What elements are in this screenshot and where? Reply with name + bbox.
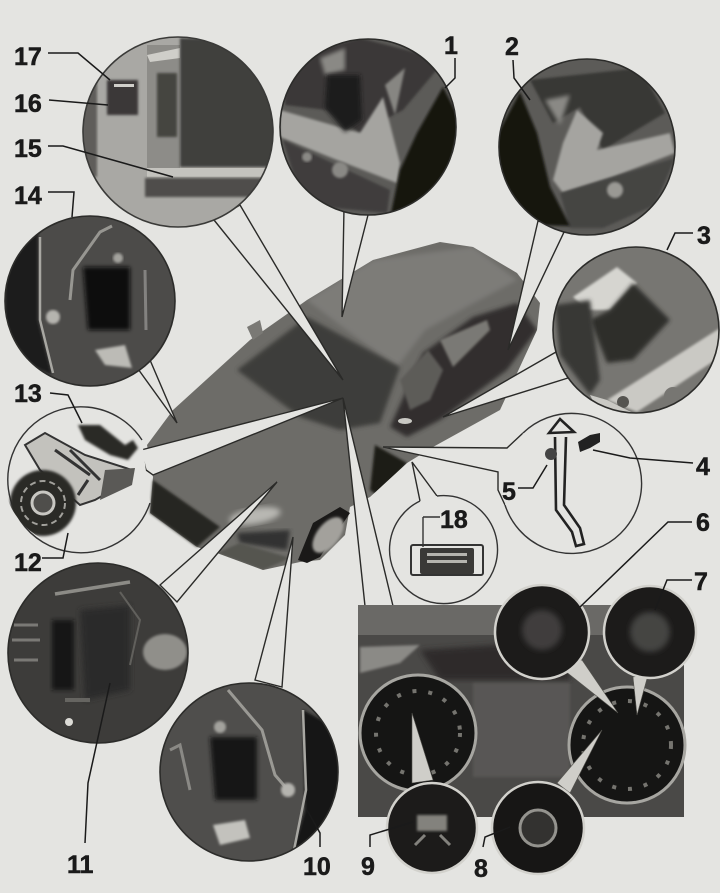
wedge to inset 1 xyxy=(342,208,368,317)
speedometer xyxy=(360,675,476,791)
label 1: 1 xyxy=(444,32,458,60)
front wheel xyxy=(298,507,350,563)
panel: circle inset 11 engine bay xyxy=(8,563,188,743)
panel: circle inset 4-5 brake pedal xyxy=(505,413,642,553)
label 16: 16 xyxy=(14,90,42,118)
panel: instrument cluster xyxy=(358,605,685,817)
wedge to inset 10 xyxy=(255,537,293,687)
label 11: 11 xyxy=(67,851,94,879)
panel: circle inset 3 fuse box xyxy=(553,247,720,415)
label 6: 6 xyxy=(696,509,710,537)
wedge to inset 3 xyxy=(443,352,568,417)
label 7: 7 xyxy=(694,568,708,596)
side windows area xyxy=(390,303,537,437)
circle inset 6 warning lamp xyxy=(495,585,589,679)
door mirror xyxy=(247,320,263,340)
label 9: 9 xyxy=(361,853,375,881)
tachometer xyxy=(569,687,685,803)
cluster callout wedges xyxy=(412,660,648,793)
label 4: 4 xyxy=(696,453,710,481)
label 13: 13 xyxy=(14,380,42,408)
grille xyxy=(150,480,220,547)
hood highlight xyxy=(228,504,282,528)
roof xyxy=(307,247,517,367)
label 5: 5 xyxy=(502,478,516,506)
panel: circle inset 18 connector xyxy=(390,496,498,604)
wedge to inset 4-5 xyxy=(383,433,560,505)
wedge to inset 11 xyxy=(160,482,277,602)
wedge to inset 12-13 xyxy=(141,398,343,475)
label 18: 18 xyxy=(440,506,468,534)
panel: circle inset 10 wheel arch xyxy=(160,683,340,862)
label 8: 8 xyxy=(474,855,488,883)
label 15: 15 xyxy=(14,135,42,163)
wedge to inset 2 xyxy=(508,221,565,350)
icon: pedal arm xyxy=(555,437,584,546)
leader wedges xyxy=(133,205,568,687)
circle inset 9 warning lamp xyxy=(387,783,477,873)
circle inset 8 warning lamp xyxy=(492,782,584,874)
windshield xyxy=(237,317,400,430)
label 2: 2 xyxy=(505,33,519,61)
circle inset 7 warning lamp xyxy=(604,586,696,678)
panel: circle inset 14 wheel arch xyxy=(5,216,175,386)
panel: circle inset 1 engine bay xyxy=(280,38,460,218)
label 17: 17 xyxy=(14,43,42,71)
car body xyxy=(147,242,540,570)
wedge to inset 14 xyxy=(133,360,177,423)
label 10: 10 xyxy=(303,853,331,881)
label 12: 12 xyxy=(14,549,42,577)
panel: circle inset 15-17 door interior xyxy=(82,37,275,227)
label 3: 3 xyxy=(697,222,711,250)
label 14: 14 xyxy=(14,182,42,210)
wedge to inset 18 xyxy=(412,462,437,501)
wedge to inset 15-17 xyxy=(214,205,343,380)
panel: circle inset 2 engine bay xyxy=(496,59,675,235)
panel: circle inset 12-13 clock spring xyxy=(8,407,150,553)
wedge to instrument cluster xyxy=(343,398,393,606)
